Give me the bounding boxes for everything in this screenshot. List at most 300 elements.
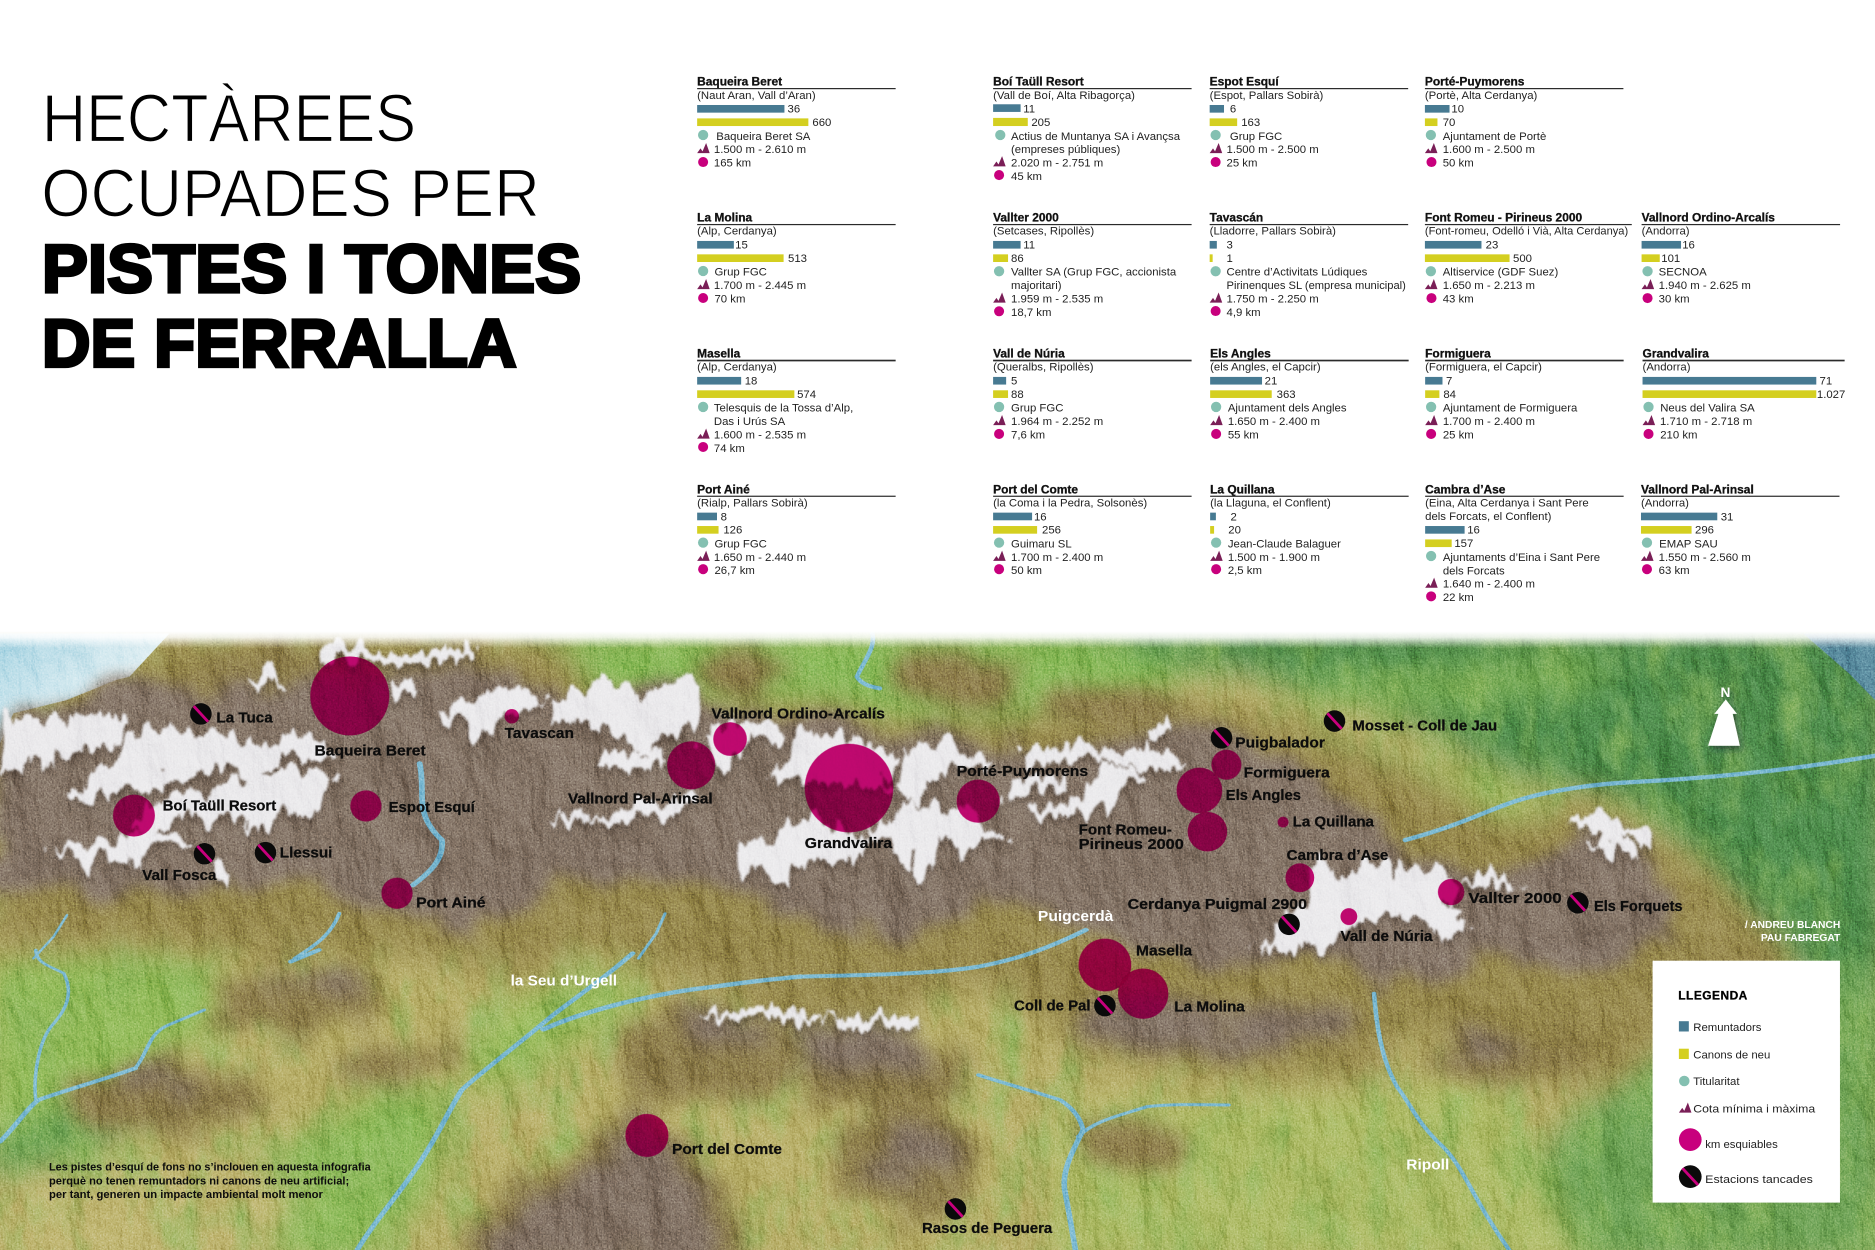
title: HECTÀREES	[42, 81, 416, 157]
credit	[1745, 920, 1841, 944]
panel: Vallter 2000	[993, 211, 1192, 319]
altitude: 2.020 m - 2.751 m	[1011, 158, 1103, 170]
altitude: 1.500 m - 2.500 m	[1227, 144, 1319, 156]
bar: remuntadors: 15	[735, 240, 748, 252]
ski km: 25 km	[1227, 158, 1257, 170]
bar: remuntadors: 8	[721, 511, 727, 523]
closed station: La Tuca	[190, 703, 212, 725]
bar: canons de neu	[993, 253, 1024, 265]
map labels: Espot Esquí	[389, 800, 476, 816]
ski km	[1426, 591, 1474, 604]
owner	[1426, 551, 1600, 577]
bar: canons de neu	[993, 525, 1061, 537]
rivers	[0, 633, 1875, 1250]
bar: remuntadors: 16	[1467, 525, 1480, 537]
title: OCUPADES PER	[41, 155, 540, 231]
owner: Guimaru SL	[1011, 538, 1072, 550]
ski km: 22 km	[1443, 592, 1474, 604]
bar: canons de neu: 574	[797, 389, 816, 401]
legend: estacions tancades: Estacions tancades	[1705, 1174, 1813, 1186]
closed station: Puigbalador	[1211, 727, 1232, 749]
ski km: 2,5 km	[1228, 565, 1262, 577]
bar: canons de neu	[1210, 117, 1260, 129]
ski km: 43 km	[1443, 294, 1474, 306]
ski km: 165 km	[714, 158, 751, 170]
map labels: Vallnord Ordino-Arcalís	[711, 707, 885, 723]
bar: remuntadors	[993, 376, 1017, 388]
ski km	[1426, 293, 1474, 306]
closed station: Coll de Pal	[1094, 995, 1116, 1016]
bar: canons de neu: 20	[1228, 525, 1241, 537]
bar: remuntadors: 11	[1023, 104, 1035, 116]
bar: canons de neu	[697, 389, 816, 401]
panel: Baqueira Beret	[697, 75, 896, 170]
panel: Tavascán	[1210, 211, 1408, 319]
location	[1425, 497, 1589, 523]
map labels: Boí Taüll Resort	[163, 799, 276, 815]
bar: remuntadors	[1210, 376, 1277, 388]
bar: remuntadors	[1425, 525, 1480, 537]
ski km	[698, 157, 751, 170]
bar: canons de neu: 363	[1277, 389, 1296, 401]
station name: Port Ainé	[697, 482, 750, 496]
credit: PAU FABREGAT	[1761, 933, 1841, 944]
altitude: 1.650 m - 2.400 m	[1228, 416, 1320, 428]
closed station: Mosset	[1324, 710, 1345, 732]
bar: remuntadors	[993, 511, 1047, 523]
bar: canons de neu: 70	[1443, 117, 1455, 129]
location: (Queralbs, Ripollès)	[993, 362, 1094, 374]
panel: Vallnord Pal-Arinsal	[1641, 482, 1839, 577]
marker: Tavascan	[505, 709, 519, 723]
panel: Vall de Núria	[993, 347, 1192, 442]
map labels: La Molina	[1174, 1000, 1246, 1016]
map labels: Masella	[1136, 943, 1193, 959]
bar: canons de neu: 256	[1042, 525, 1061, 537]
altitude: 1.959 m - 2.535 m	[1011, 294, 1103, 306]
marker: Vallnord Pal-Arinsal	[667, 741, 715, 789]
bar: remuntadors	[1210, 511, 1237, 523]
panel: Els Angles	[1210, 347, 1409, 442]
ski km	[994, 564, 1042, 577]
bar: remuntadors	[1425, 240, 1498, 252]
panel: legend	[1653, 961, 1840, 1203]
altitude: 1.700 m - 2.400 m	[1443, 416, 1535, 428]
altitude: 1.500 m - 1.900 m	[1228, 552, 1320, 564]
bar: remuntadors: 7	[1446, 376, 1452, 388]
owner: Telesquis de la Tossa d’Alp,	[714, 403, 853, 415]
marker: Masella	[1079, 939, 1131, 991]
title: DE FERRALLA	[42, 306, 517, 382]
owner: Ajuntaments d’Eina i Sant Pere	[1443, 552, 1600, 564]
owner: Altiservice (GDF Suez)	[1443, 267, 1558, 279]
bar: canons de neu	[1642, 253, 1680, 265]
altitude: 1.650 m - 2.440 m	[714, 552, 806, 564]
bar: remuntadors	[697, 511, 727, 523]
bar: canons de neu	[697, 253, 807, 265]
bar: remuntadors: 11	[1023, 240, 1035, 252]
closed station: Llessui	[255, 842, 276, 863]
bar: remuntadors: 36	[788, 104, 800, 116]
bar: canons de neu	[697, 525, 742, 537]
snow-capped peaks	[0, 642, 1658, 1028]
bar: canons de neu	[1210, 525, 1241, 537]
altitude: 1.700 m - 2.400 m	[1011, 552, 1103, 564]
map labels: Llessui	[280, 845, 332, 861]
title: PISTES I TONES	[42, 231, 581, 307]
legend: titularitat: Titularitat	[1693, 1076, 1740, 1088]
map labels: Cambra d’Ase	[1287, 848, 1388, 864]
bar: canons de neu	[1210, 389, 1296, 401]
note text	[49, 1162, 372, 1201]
owner: majoritari)	[1011, 280, 1062, 292]
panel: Vallnord Ordino-Arcalís	[1642, 211, 1840, 306]
ridge shading	[0, 631, 1875, 1250]
panel: La Molina	[697, 211, 896, 306]
bar: remuntadors	[993, 104, 1035, 116]
location: (Espot, Pallars Sobirà)	[1210, 90, 1324, 102]
ski km: 70 km	[714, 294, 745, 306]
ski km	[1211, 429, 1259, 442]
station name: Grandvalira	[1643, 347, 1709, 361]
map labels: Port del Comte	[672, 1142, 782, 1158]
bar: canons de neu: 513	[788, 253, 807, 265]
altitude: 1.964 m - 2.252 m	[1011, 416, 1103, 428]
marker: Vallnord Ordino-Arcalís	[713, 722, 747, 756]
bar: canons de neu: 205	[1031, 117, 1050, 129]
bar: remuntadors: 16	[1682, 240, 1695, 252]
bar: canons de neu	[1641, 525, 1714, 537]
ski km: 210 km	[1660, 430, 1698, 442]
map labels: La Tuca	[216, 710, 274, 726]
bar: remuntadors: 71	[1820, 376, 1832, 388]
ski km	[698, 293, 745, 306]
owner: EMAP SAU	[1659, 538, 1718, 550]
owner: Neus del Valira SA	[1660, 403, 1755, 415]
bar: canons de neu: 88	[1011, 389, 1024, 401]
marker: Font Romeu	[1188, 812, 1227, 851]
ski km	[1211, 157, 1257, 170]
map labels: Ripoll	[1406, 1157, 1449, 1173]
owner: Grup FGC	[714, 267, 767, 279]
ski km: 50 km	[1443, 158, 1474, 170]
ski km: 74 km	[714, 443, 745, 455]
location: (Andorra)	[1643, 362, 1691, 374]
panel: Cambra d'Ase	[1425, 482, 1624, 604]
map labels: Rasos de Peguera	[922, 1221, 1053, 1237]
note text: perquè no tenen remuntadors ni canons de neu artificial;	[49, 1175, 349, 1187]
altitude: 1.750 m - 2.250 m	[1227, 294, 1319, 306]
bar: canons de neu	[1643, 389, 1845, 401]
ski km: 4,9 km	[1227, 307, 1261, 319]
owner: Grup FGC	[714, 538, 767, 550]
marker: Formiguera	[1211, 750, 1241, 780]
marker: Grandvalira	[805, 744, 893, 832]
note text: Les pistes d’esquí de fons no s’inclouen en aquesta infografia	[49, 1162, 372, 1174]
bar: canons de neu	[993, 389, 1024, 401]
legend: km esquiables: km esquiables	[1705, 1139, 1778, 1151]
panel: Porté-Puymorens	[1425, 75, 1623, 170]
bar: canons de neu: 163	[1241, 117, 1260, 129]
map labels: Baqueira Beret	[314, 744, 426, 760]
station name: Boí Taüll Resort	[993, 75, 1084, 89]
marker: Port del Comte	[625, 1114, 668, 1157]
panel: Espot Esquí	[1210, 75, 1408, 170]
marker: Vall de Núria	[1340, 908, 1357, 925]
credit: / ANDREU BLANCH	[1745, 920, 1840, 931]
owner: Das i Urús SA	[714, 416, 786, 428]
station name: Baqueira Beret	[697, 75, 782, 89]
bar: remuntadors: 16	[1034, 511, 1047, 523]
bar: canons de neu: 1	[1227, 253, 1233, 265]
bar: canons de neu	[1210, 253, 1233, 265]
ski km	[994, 429, 1045, 442]
map labels: Coll de Pal	[1014, 998, 1091, 1014]
altitude: 1.710 m - 2.718 m	[1660, 416, 1752, 428]
station name: Tavascán	[1210, 211, 1263, 225]
map labels: Vall Fosca	[142, 868, 218, 884]
owner: Vallter SA (Grup FGC, accionista	[1011, 267, 1177, 279]
location: (Setcases, Ripollès)	[993, 226, 1094, 238]
legend: canons de neu: Canons de neu	[1693, 1049, 1770, 1061]
ski km: 30 km	[1659, 294, 1690, 306]
location: (Formiguera, el Capcir)	[1425, 362, 1542, 374]
map labels: Puigcerdà	[1038, 909, 1113, 925]
station name: Font Romeu - Pirineus 2000	[1425, 211, 1582, 225]
owner	[1210, 130, 1282, 143]
map labels: Porté-Puymorens	[957, 764, 1088, 780]
closed station: Els Forquets	[1567, 892, 1589, 914]
owner: Ajuntament de Formiguera	[1443, 403, 1578, 415]
bar: remuntadors: 5	[1011, 376, 1017, 388]
location: dels Forcats, el Conflent)	[1425, 511, 1552, 523]
bar: remuntadors: 2	[1230, 511, 1237, 523]
bar: canons de neu: 660	[812, 117, 831, 129]
station name: Espot Esquí	[1210, 75, 1279, 89]
marker: Boí Taüll Resort	[113, 795, 155, 836]
fine grain	[0, 631, 1875, 1250]
legend: estacions tancades	[1679, 1165, 1813, 1188]
bar: canons de neu: 500	[1513, 253, 1532, 265]
marker: Vallter 2000	[1438, 879, 1464, 905]
station name: Vallnord Ordino-Arcalís	[1642, 211, 1775, 225]
owner: Grup FGC	[1011, 403, 1063, 415]
legend heading: LLEGENDA	[1678, 989, 1748, 1003]
marker: Port Ainé	[381, 878, 413, 909]
closed station: Cerdanya Puigmal	[1278, 914, 1300, 935]
bar: remuntadors	[993, 240, 1035, 252]
map labels	[142, 707, 1683, 1237]
station name: Vallter 2000	[993, 211, 1059, 225]
panel: La Quillana	[1210, 482, 1409, 577]
marker: Porté-Puymorens	[957, 780, 1000, 823]
station name: Port del Comte	[993, 482, 1078, 496]
panel: Font Romeu - Pirineus 2000	[1425, 211, 1632, 306]
bar: canons de neu: 126	[723, 525, 742, 537]
ski km: 45 km	[1011, 171, 1042, 183]
ski km: 55 km	[1228, 430, 1259, 442]
station name: Vall de Núria	[993, 347, 1065, 361]
top fade to white	[0, 631, 1875, 648]
ski km	[1426, 157, 1474, 170]
station name: Els Angles	[1210, 347, 1271, 361]
note text: per tant, generen un impacte ambiental molt menor	[49, 1189, 324, 1201]
bar: remuntadors	[697, 104, 800, 116]
bar: remuntadors: 6	[1230, 104, 1236, 116]
bar: remuntadors	[697, 376, 757, 388]
panel: Masella	[697, 347, 896, 455]
closed station: Rasos de Peguera	[945, 1198, 966, 1220]
location: (Alp, Cerdanya)	[697, 226, 777, 238]
marker: La Molina	[1118, 969, 1168, 1019]
bar: remuntadors: 10	[1451, 104, 1464, 116]
owner: (empreses públiques)	[1011, 144, 1120, 156]
bar: canons de neu	[993, 117, 1050, 129]
location: (Andorra)	[1642, 226, 1690, 238]
ski km	[994, 170, 1042, 183]
bar: canons de neu: 101	[1661, 253, 1680, 265]
station name: Cambra d’Ase	[1425, 482, 1506, 496]
bar: canons de neu	[1425, 538, 1473, 550]
ski km	[1642, 564, 1690, 577]
legend: remuntadors: Remuntadors	[1693, 1022, 1762, 1034]
owner: Ajuntament de Portè	[1443, 131, 1546, 143]
bar: canons de neu	[1425, 389, 1456, 401]
station name: Masella	[697, 347, 741, 361]
altitude: 1.940 m - 2.625 m	[1659, 280, 1751, 292]
map labels: Tavascan	[505, 726, 574, 742]
ski km	[1643, 429, 1698, 442]
altitude: 1.700 m - 2.445 m	[714, 280, 806, 292]
title	[41, 81, 581, 382]
bar: remuntadors	[1643, 376, 1832, 388]
ski km: 25 km	[1443, 430, 1474, 442]
map labels: Cerdanya Puigmal 2900	[1128, 897, 1307, 913]
map labels: Els Forquets	[1594, 899, 1683, 915]
icon: north arrow	[1708, 685, 1740, 746]
ski km	[1211, 564, 1262, 577]
altitude: 1.640 m - 2.400 m	[1443, 579, 1535, 591]
bar: remuntadors	[1641, 511, 1733, 523]
bar: remuntadors	[1642, 240, 1695, 252]
map: relief terrain of the Pyrenees	[0, 622, 1875, 1250]
ski km	[698, 442, 745, 455]
bar: canons de neu	[697, 117, 831, 129]
location: (Lladorre, Pallars Sobirà)	[1210, 226, 1336, 238]
map labels: Vallter 2000	[1468, 891, 1562, 907]
bar: canons de neu: 157	[1454, 538, 1473, 550]
map labels: Pirineus 2000	[1079, 837, 1184, 853]
owner: SECNOA	[1659, 267, 1707, 279]
ski km	[1643, 293, 1690, 306]
legend: cota: Cota mínima i màxima	[1693, 1104, 1816, 1116]
owner	[994, 266, 1177, 292]
station name: Vallnord Pal-Arinsal	[1641, 482, 1754, 496]
marker: Cambra d'Ase	[1285, 863, 1314, 892]
owner: Grup FGC	[1230, 131, 1282, 143]
owner: Baqueira Beret SA	[716, 131, 811, 143]
station name: La Molina	[697, 211, 753, 225]
bar: canons de neu: 84	[1443, 389, 1456, 401]
map labels: La Quillana	[1293, 814, 1375, 830]
bar: remuntadors	[1425, 376, 1452, 388]
owner: dels Forcats	[1443, 565, 1505, 577]
ski km: 26,7 km	[714, 565, 755, 577]
location: (Eina, Alta Cerdanya i Sant Pere	[1425, 497, 1589, 509]
marker: Espot Esquí	[350, 790, 381, 822]
icon: north arrow: N	[1721, 685, 1730, 700]
owner: Ajuntament dels Angles	[1228, 403, 1347, 415]
location: (Font-romeu, Odelló i Vià, Alta Cerdanya)	[1425, 226, 1628, 238]
map labels: Formiguera	[1244, 765, 1331, 781]
location: (la Llaguna, el Conflent)	[1210, 497, 1331, 509]
owner: Actius de Muntanya SA i Avançsa	[1011, 131, 1181, 143]
location: (la Coma i la Pedra, Solsonès)	[993, 497, 1147, 509]
sky	[0, 633, 170, 743]
altitude: 1.550 m - 2.560 m	[1659, 552, 1751, 564]
location: (els Angles, el Capcir)	[1210, 362, 1321, 374]
ski km: 18,7 km	[1011, 307, 1051, 319]
map labels: la Seu d’Urgell	[511, 973, 617, 989]
location: (Naut Aran, Vall d’Aran)	[697, 90, 816, 102]
location: (Rialp, Pallars Sobirà)	[697, 497, 808, 509]
owner	[995, 130, 1181, 156]
owner: Jean-Claude Balaguer	[1228, 538, 1341, 550]
panel: Port Ainé	[697, 482, 896, 577]
bar: remuntadors	[1210, 240, 1233, 252]
map labels: Els Angles	[1226, 788, 1301, 804]
bar: remuntadors: 31	[1721, 511, 1733, 523]
station name: La Quillana	[1210, 482, 1275, 496]
altitude: 1.600 m - 2.500 m	[1443, 144, 1535, 156]
marker: Els Angles	[1177, 768, 1222, 813]
ski km	[698, 564, 755, 577]
owner: Centre d’Activitats Lúdiques	[1227, 267, 1368, 279]
panel: Formiguera	[1425, 347, 1624, 442]
station name: Porté-Puymorens	[1425, 75, 1525, 89]
map labels: Vall de Núria	[1340, 929, 1434, 945]
map labels: Vallnord Pal-Arinsal	[568, 792, 713, 808]
bar: remuntadors	[697, 240, 748, 252]
map labels: Mosset - Coll de Jau	[1352, 719, 1497, 735]
owner	[1210, 266, 1406, 292]
owner: Pirinenques SL (empresa municipal)	[1227, 280, 1406, 292]
map labels: Font Romeu-	[1079, 823, 1172, 839]
ski km	[994, 306, 1051, 319]
bar: remuntadors: 21	[1265, 376, 1277, 388]
owner	[698, 402, 853, 428]
sea	[1803, 633, 1875, 700]
altitude: 1.600 m - 2.535 m	[714, 430, 806, 442]
ski km: 50 km	[1011, 565, 1042, 577]
ski km	[1211, 306, 1261, 319]
location: (Portè, Alta Cerdanya)	[1425, 90, 1538, 102]
panel: Grandvalira	[1643, 347, 1845, 442]
bar: remuntadors: 3	[1227, 240, 1233, 252]
altitude: 1.500 m - 2.610 m	[714, 144, 806, 156]
map labels: Puigbalador	[1235, 735, 1325, 751]
map labels: Grandvalira	[805, 836, 893, 852]
legend: km esquiables	[1679, 1128, 1778, 1151]
ski km: 7,6 km	[1011, 430, 1045, 442]
ski km: 63 km	[1659, 565, 1690, 577]
marker: La Quillana	[1278, 817, 1288, 827]
bar: canons de neu: 1.027	[1817, 389, 1845, 401]
bar: remuntadors	[1425, 104, 1464, 116]
location: (Vall de Boí, Alta Ribagorça)	[993, 90, 1135, 102]
ski km	[1426, 429, 1474, 442]
bar: canons de neu	[1425, 117, 1455, 129]
